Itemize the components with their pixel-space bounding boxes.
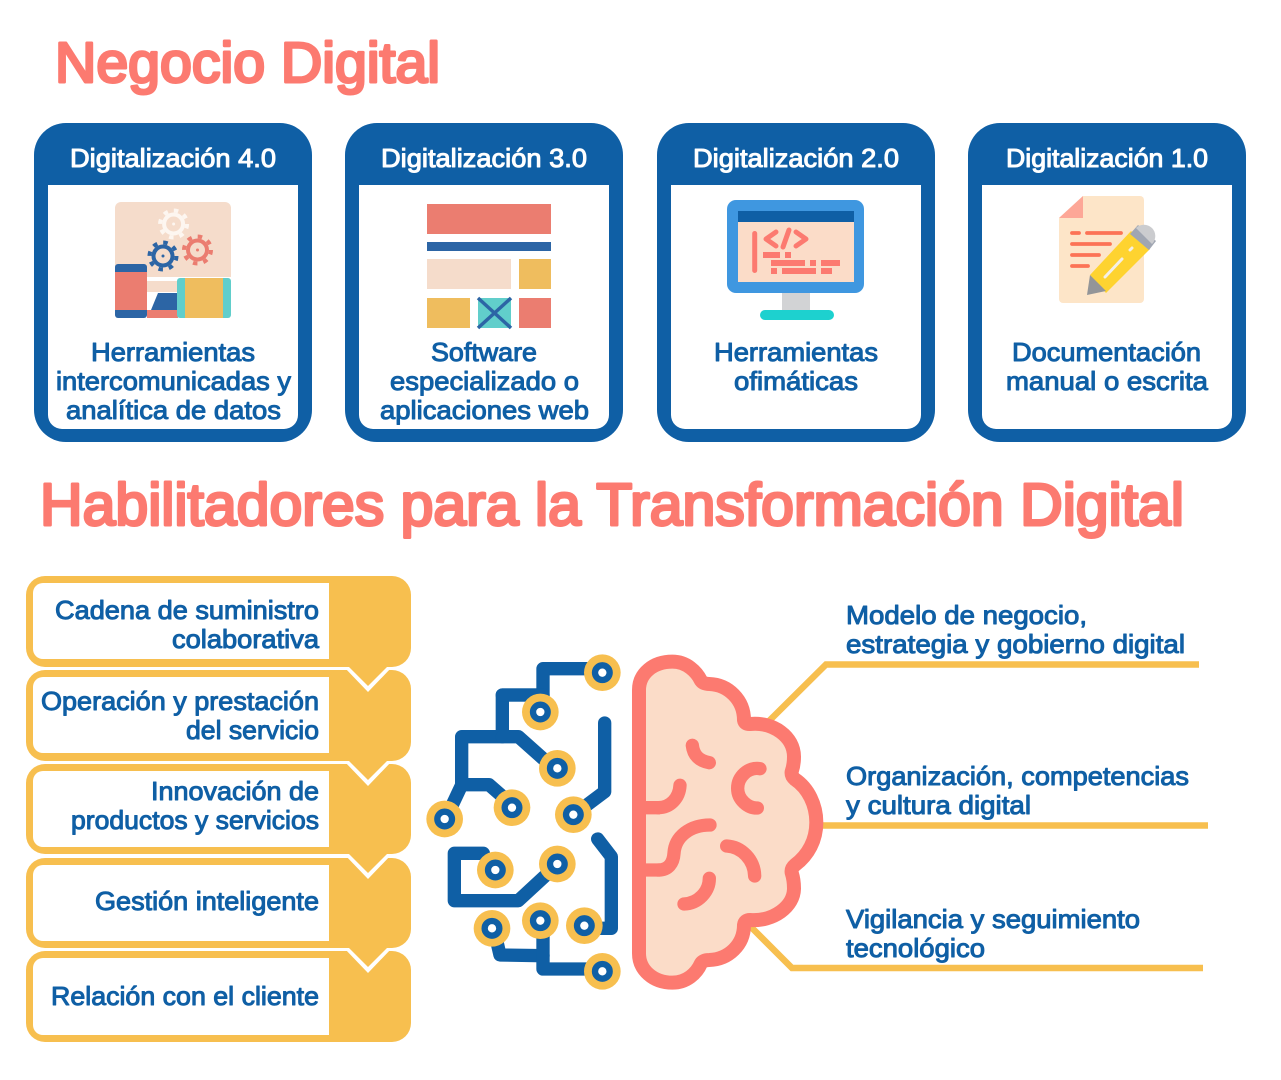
icon: gears and devices bbox=[115, 202, 231, 318]
text: Herramientas intercomunicadas y analítica de datos bbox=[56, 337, 291, 425]
label: Vigilancia y seguimiento tecnológico: Vigilancia y seguimiento bbox=[846, 904, 1140, 934]
list item: Innovación de productos y servicios: Innovación de bbox=[151, 776, 319, 806]
label: Organización, competencias y cultura digital: y cultura digital bbox=[846, 790, 1031, 820]
icon: web layout bbox=[427, 204, 551, 328]
label: Vigilancia y seguimiento tecnológico: tecnológico bbox=[846, 933, 985, 963]
label: Modelo de negocio, estrategia y gobierno digital: Modelo de negocio, bbox=[846, 600, 1087, 630]
heading: Digitalización 4.0: Digitalización 4.0 bbox=[70, 143, 276, 173]
list item: Cadena de suministro colaborativa: colaborativa bbox=[172, 624, 320, 654]
text: Herramientas intercomunicadas y analítica de datos: analítica de datos bbox=[66, 395, 281, 425]
text: Software especializado o aplicaciones web: Software bbox=[431, 337, 537, 367]
list item: Innovación de productos y servicios bbox=[26, 764, 411, 879]
text: Documentación manual o escrita: manual o escrita bbox=[1006, 366, 1209, 396]
panel: Digitalización 4.0 bbox=[34, 123, 312, 442]
label: Organización, competencias y cultura digital: Organización, competencias bbox=[846, 761, 1189, 791]
list item: Operación y prestación del servicio bbox=[26, 670, 411, 786]
icon: document and pencil bbox=[1059, 196, 1156, 303]
connector lines to brain bbox=[750, 664, 1208, 968]
list item: Relación con el cliente: Relación con el cliente bbox=[51, 981, 319, 1011]
label: Vigilancia y seguimiento tecnológico bbox=[846, 904, 1140, 963]
list item: Relación con el cliente bbox=[26, 951, 411, 1042]
label: Modelo de negocio, estrategia y gobierno digital bbox=[846, 600, 1185, 659]
label: Organización, competencias y cultura digital bbox=[846, 761, 1189, 820]
chevron list of enablers bbox=[26, 576, 411, 1042]
text: Herramientas intercomunicadas y analítica de datos: Herramientas bbox=[91, 337, 255, 367]
list item: Cadena de suministro colaborativa bbox=[26, 576, 411, 692]
list item: Operación y prestación del servicio: del servicio bbox=[186, 715, 319, 745]
icon: computer monitor with code bbox=[727, 200, 864, 320]
panel: Digitalización 2.0 bbox=[657, 123, 935, 442]
text: Herramientas ofimáticas: ofimáticas bbox=[734, 366, 858, 396]
text: Software especializado o aplicaciones web: especializado o bbox=[390, 366, 579, 396]
text: Software especializado o aplicaciones web: aplicaciones web bbox=[380, 395, 589, 425]
title: Negocio Digital: Negocio Digital bbox=[55, 31, 440, 95]
text: Herramientas ofimáticas: Herramientas bbox=[714, 337, 878, 367]
label: Modelo de negocio, estrategia y gobierno digital: estrategia y gobierno digital bbox=[846, 629, 1185, 659]
text: Herramientas intercomunicadas y analítica de datos: intercomunicadas y bbox=[56, 366, 291, 396]
text: Software especializado o aplicaciones web bbox=[380, 337, 589, 425]
heading: Digitalización 2.0: Digitalización 2.0 bbox=[693, 143, 899, 173]
icon: brain half bbox=[639, 662, 816, 983]
panel: Digitalización 3.0 bbox=[345, 123, 623, 442]
text: Documentación manual o escrita bbox=[1006, 337, 1209, 396]
list item: Gestión inteligente bbox=[26, 858, 411, 973]
icon: circuit half of the brain bbox=[426, 654, 621, 990]
list item: Innovación de productos y servicios: productos y servicios bbox=[71, 805, 319, 835]
heading: Digitalización 1.0: Digitalización 1.0 bbox=[1006, 143, 1208, 173]
title: Habilitadores para la Transformación Digital: Habilitadores para la Transformación Digital bbox=[40, 472, 1184, 538]
list item: Cadena de suministro colaborativa: Cadena de suministro bbox=[55, 595, 319, 625]
list item: Gestión inteligente: Gestión inteligente bbox=[95, 886, 319, 916]
text: Herramientas ofimáticas bbox=[714, 337, 878, 396]
list item: Operación y prestación del servicio: Operación y prestación bbox=[41, 686, 319, 716]
text: Documentación manual o escrita: Documentación bbox=[1012, 337, 1201, 367]
panel: Digitalización 1.0 bbox=[968, 123, 1246, 442]
heading: Digitalización 3.0: Digitalización 3.0 bbox=[381, 143, 587, 173]
